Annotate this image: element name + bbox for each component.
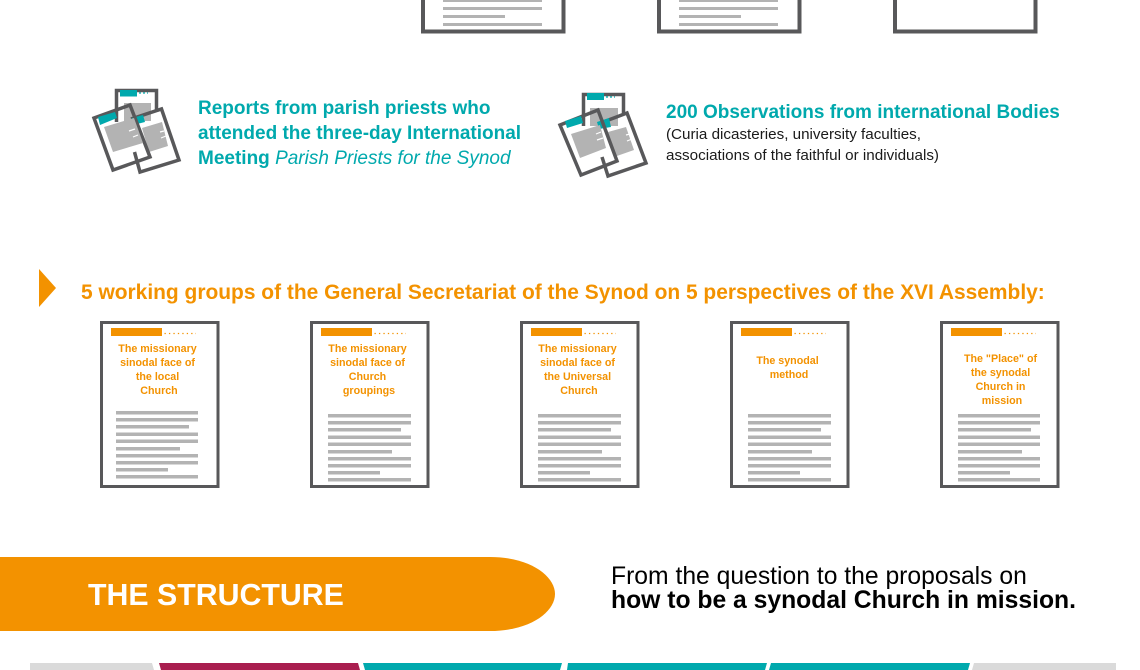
document: place of the synodal Church: Church in xyxy=(976,381,1025,393)
document: Church groupings: The missionary xyxy=(328,343,407,355)
text: 200 observations xyxy=(666,102,1060,164)
document: Universal Church xyxy=(522,322,638,486)
document: Universal Church: sinodal face of xyxy=(540,357,615,369)
document: Church groupings: sinodal face of xyxy=(330,357,405,369)
text: from the question to the proposals: how to be a synodal Church in mission. xyxy=(611,587,1076,614)
text: 200 observations: associations of the faithful or individuals) xyxy=(666,147,939,164)
document: Universal Church: The missionary xyxy=(538,343,617,355)
text: from the question to the proposals: From the question to the proposals on xyxy=(611,563,1027,590)
text: from the question to the proposals xyxy=(611,563,1076,614)
text: 200 observations: (Curia dicasteries, university faculties, xyxy=(666,126,921,143)
document: local Church xyxy=(102,322,218,486)
text: reports from parish priests: Reports from parish priests who xyxy=(198,98,490,119)
icon: stacked reports right xyxy=(560,93,646,176)
document: local Church: sinodal face of xyxy=(120,357,195,369)
document icon 1 xyxy=(423,0,564,32)
document: Church groupings: Church xyxy=(349,371,386,383)
document: synodal method: method xyxy=(770,369,808,381)
text: 200 observations: 200 Observations from international Bodies xyxy=(666,102,1060,123)
text: reports from parish priests: Meeting Parish Priests for the Synod xyxy=(198,148,511,169)
document: Church groupings: groupings xyxy=(343,385,395,397)
document icon 2 xyxy=(659,0,800,32)
document: local Church: the local xyxy=(136,371,179,383)
bottom tab strip xyxy=(30,663,1116,670)
document: Universal Church: Church xyxy=(560,385,598,397)
document icon 3 xyxy=(895,0,1036,32)
document: synodal method xyxy=(732,322,848,486)
document: place of the synodal Church: The "Place" of xyxy=(964,353,1037,365)
icon: stacked reports left xyxy=(94,90,179,172)
document: local Church: Church xyxy=(140,385,178,397)
document: Universal Church: the Universal xyxy=(544,371,611,383)
document icons cut off at top xyxy=(423,0,1036,32)
document: local Church: The missionary xyxy=(118,343,197,355)
document: place of the synodal Church: mission xyxy=(982,395,1022,407)
banner: the structure: THE STRUCTURE xyxy=(88,579,344,612)
text: reports from parish priests: attended the three-day International xyxy=(198,123,521,144)
document: place of the synodal Church xyxy=(942,322,1058,486)
document: Church groupings xyxy=(312,322,428,486)
heading: 5 working groups: 5 working groups of the General Secretariat of the Synod on 5 perspectives of the XVI Assembly: xyxy=(81,281,1045,304)
arrow marker xyxy=(39,269,56,307)
document: synodal method: The synodal xyxy=(756,355,819,367)
document: place of the synodal Church: the synodal xyxy=(971,367,1030,379)
banner: the structure xyxy=(0,557,555,631)
